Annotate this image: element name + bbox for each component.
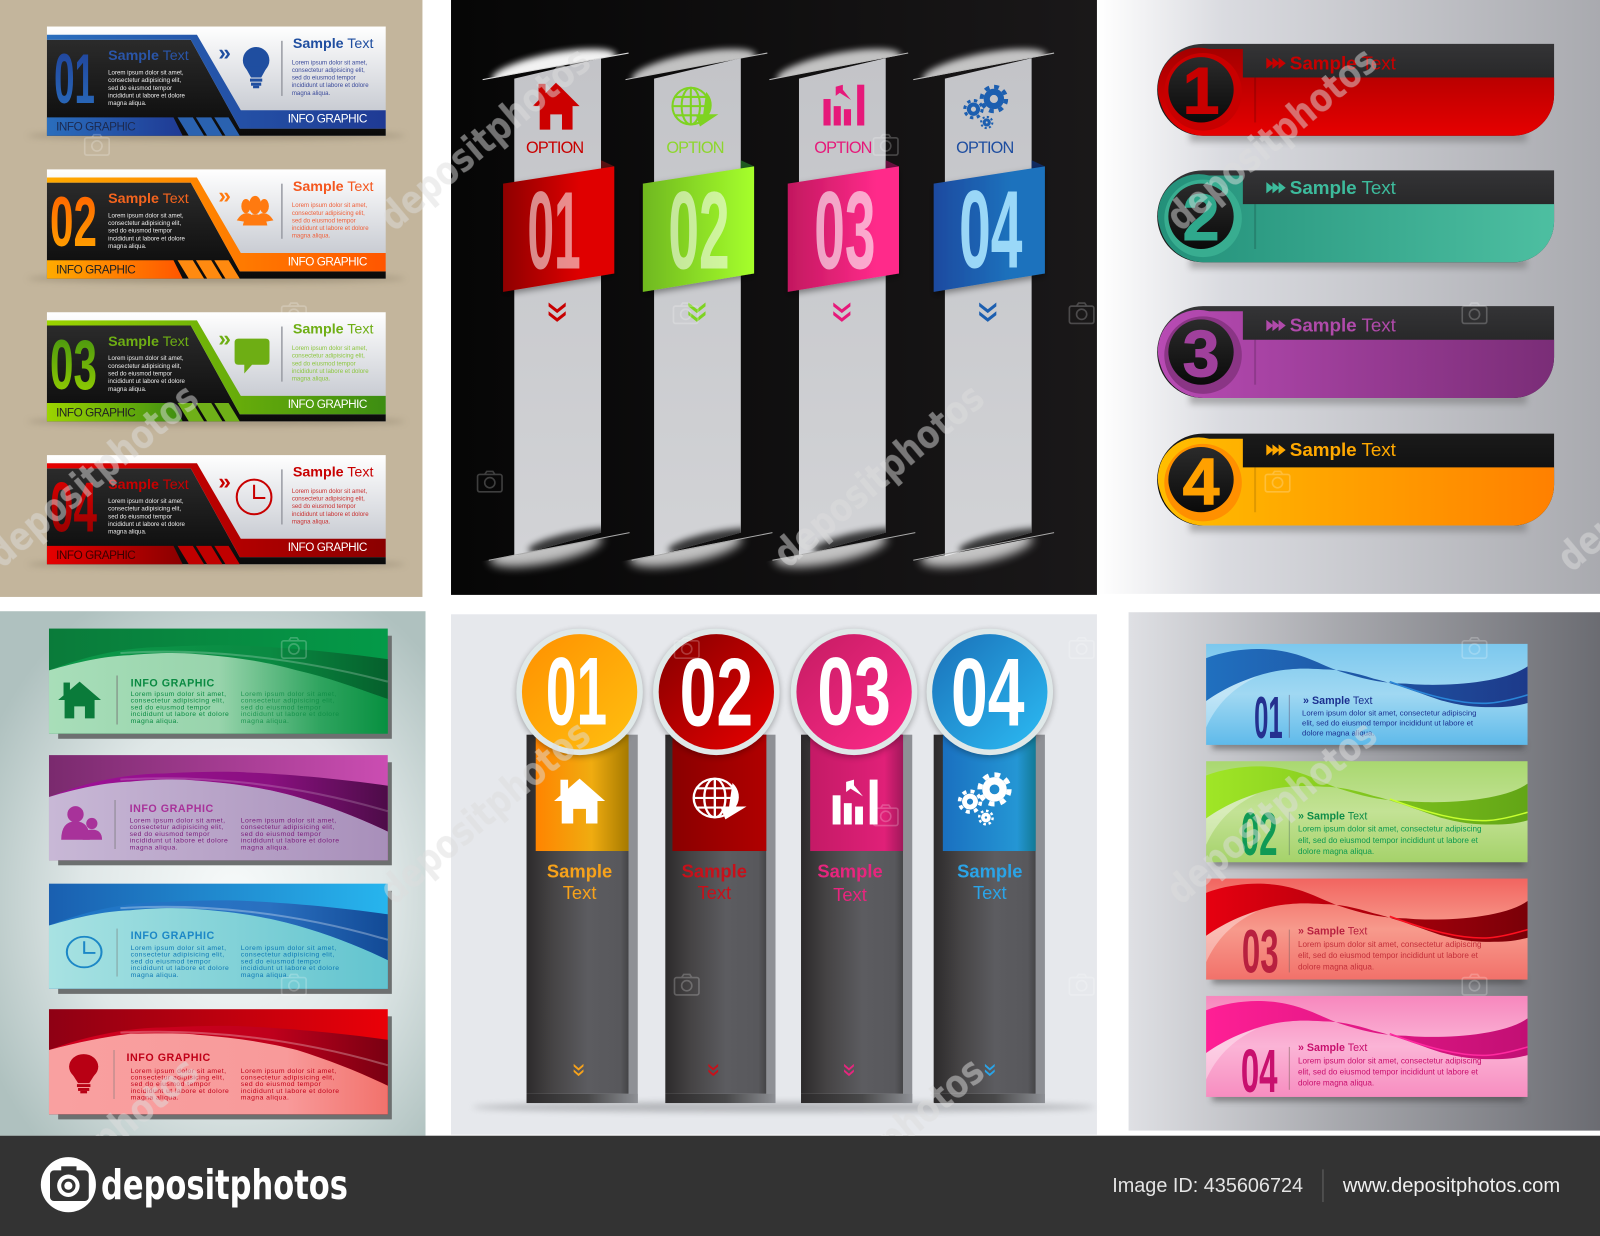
wave banner blue: dolore magna aliqua. [1302, 729, 1374, 738]
option strip 03 pink: OPTION [814, 139, 872, 157]
banner 03 green: » [218, 326, 231, 351]
curved banner purple: incididunt ut labore et dolore [241, 838, 339, 845]
pill banner 3 purple [1157, 306, 1554, 404]
curved banner green: magna aliqua. [241, 718, 289, 725]
banner 04 red [28, 455, 405, 568]
watermark: repeated depositphotos text and camera icons: depositphotos [765, 375, 994, 577]
curved banner red: incididunt ut labore et dolore [131, 1088, 229, 1095]
wave banner pink: Lorem ipsum dolor sit amet, consectetur adipiscing [1298, 1056, 1482, 1065]
option strip 02 green: 02 [668, 169, 730, 292]
wave banner green: elit, sed do eiusmod tempor incididunt ut labore et [1298, 836, 1479, 845]
curved banner green: consectetur adipisicing elit, [131, 698, 225, 705]
banner 04 red: INFO GRAPHIC [288, 541, 368, 554]
column 02 red [653, 629, 780, 1103]
banner 02 orange: INFO GRAPHIC [288, 255, 368, 268]
banner 02 orange: sed do eiusmod tempor [292, 217, 356, 224]
pill banner 4 orange: Sample Text [1290, 439, 1397, 460]
banner 01 blue: consectetur adipisicing elit, [108, 77, 181, 84]
column 01 orange: 01 [546, 636, 607, 745]
footer image id: Image ID: 435606724 [1112, 1175, 1303, 1197]
curved banner green: magna aliqua. [131, 718, 179, 725]
pill banner 4 orange: 4 [1183, 445, 1220, 519]
banner 01 blue: Lorem ipsum dolor sit amet, [292, 59, 368, 66]
column 03 pink: 03 [817, 636, 891, 745]
banner 03 green: INFO GRAPHIC [288, 398, 368, 411]
curved banner green: sed do eiusmod tempor [131, 704, 211, 711]
banner 02 orange: 02 [50, 182, 97, 261]
banner 04 red: incididunt ut labore et dolore [292, 511, 369, 518]
panel: black background with four option strips [451, 0, 1097, 595]
column 04 blue: Text [973, 882, 1007, 903]
curved banner green: Lorem ipsum dolor sit amet, [131, 691, 226, 698]
pill banner 3 purple: Sample Text [1290, 315, 1397, 336]
banner 02 orange [28, 169, 405, 283]
curved banner green: Lorem ipsum dolor sit amet, [241, 691, 337, 698]
curved banner red: magna aliqua. [131, 1094, 179, 1101]
banner 02 orange: consectetur adipisicing elit, [292, 210, 365, 217]
curved banner blue [49, 884, 392, 994]
banner 01 blue: Sample Text [293, 36, 374, 52]
wave banner green [1206, 761, 1528, 868]
column 01 orange [516, 629, 643, 1103]
banner 04 red: magna aliqua. [292, 518, 331, 525]
footer logo [41, 1157, 348, 1212]
curved banner purple [49, 755, 392, 865]
banner 01 blue: incididunt ut labore et dolore [108, 92, 186, 99]
banner 03 green: incididunt ut labore et dolore [108, 378, 186, 385]
curved banner purple: consectetur adipisicing elit, [130, 824, 224, 831]
banner 04 red: sed do eiusmod tempor [108, 513, 172, 520]
banner 03 green: sed do eiusmod tempor [292, 360, 356, 367]
option strip 04 blue: 04 [959, 168, 1022, 291]
banner 03 green: Sample Text [108, 334, 189, 350]
wave banner red: Lorem ipsum dolor sit amet, consectetur adipiscing [1298, 940, 1482, 949]
banner 01 blue: Lorem ipsum dolor sit amet, [108, 69, 184, 76]
banner 01 blue: magna aliqua. [292, 90, 331, 97]
banner 04 red: sed do eiusmod tempor [292, 503, 356, 510]
curved banner purple: consectetur adipisicing elit, [241, 824, 335, 831]
curved banner blue: incididunt ut labore et dolore [241, 965, 339, 972]
wave banner pink: 04 [1241, 1037, 1278, 1105]
column 04 blue: Sample [957, 861, 1022, 882]
banner 03 green: Lorem ipsum dolor sit amet, [108, 355, 184, 362]
panel: light grey background with four numbered columns [451, 614, 1097, 1135]
footer logo: depositphotos [101, 1161, 348, 1209]
banner 03 green: INFO GRAPHIC [56, 406, 136, 419]
option strip 02 green [626, 41, 772, 574]
curved banner purple: magna aliqua. [241, 844, 289, 851]
pill banner 1 red: Sample Text [1290, 52, 1397, 73]
column 04 blue [927, 629, 1053, 1103]
banner 04 red: consectetur adipisicing elit, [108, 506, 181, 513]
wave banner blue: 01 [1254, 684, 1283, 751]
banner 01 blue: INFO GRAPHIC [288, 112, 368, 125]
curved banner blue: Lorem ipsum dolor sit amet, [241, 945, 337, 952]
banner 01 blue: consectetur adipisicing elit, [292, 67, 365, 74]
curved banner red: sed do eiusmod tempor [131, 1081, 211, 1088]
curved banner blue: consectetur adipisicing elit, [131, 952, 225, 959]
curved banner red: sed do eiusmod tempor [241, 1081, 321, 1088]
banner 02 orange: incididunt ut labore et dolore [292, 225, 369, 232]
curved banner green: INFO GRAPHIC [131, 678, 215, 690]
wave banner green: dolore magna aliqua. [1298, 847, 1374, 856]
wave banner blue: elit, sed do eiusmod tempor incididunt ut labore et [1302, 719, 1474, 728]
curved banner red: Lorem ipsum dolor sit amet, [131, 1068, 226, 1075]
column 02 red: 02 [680, 638, 753, 747]
option strip 03 pink [769, 41, 915, 574]
banner 02 orange: magna aliqua. [292, 233, 331, 240]
curved banner green [49, 629, 392, 739]
curved banner blue: sed do eiusmod tempor [131, 958, 211, 965]
watermark: repeated depositphotos text and camera icons: depositphotos [1158, 712, 1386, 914]
curved banner blue: INFO GRAPHIC [131, 930, 215, 942]
banner 04 red: Lorem ipsum dolor sit amet, [108, 498, 184, 505]
option strip 01 red [483, 41, 630, 574]
option strip 01 red: OPTION [526, 139, 584, 157]
wave banner red: dolore magna aliqua. [1298, 962, 1374, 971]
banner 02 orange: consectetur adipisicing elit, [108, 220, 181, 227]
option strip 04 blue: OPTION [956, 139, 1014, 157]
pill banner 2 teal: Sample Text [1290, 177, 1397, 198]
banner 04 red: consectetur adipisicing elit, [292, 496, 365, 503]
column 03 pink [791, 629, 917, 1103]
curved banner blue: incididunt ut labore et dolore [131, 965, 229, 972]
curved banner purple: INFO GRAPHIC [130, 803, 214, 815]
curved banner blue: magna aliqua. [131, 972, 179, 979]
pill banner 3 purple: 3 [1183, 318, 1219, 392]
curved banner blue: sed do eiusmod tempor [241, 958, 321, 965]
wave banner pink: elit, sed do eiusmod tempor incididunt ut labore et [1298, 1067, 1479, 1076]
banner 03 green: 03 [50, 325, 97, 404]
banner 01 blue: sed do eiusmod tempor [292, 75, 356, 82]
footer bar [0, 1136, 1600, 1236]
wave banner pink: dolore magna aliqua. [1298, 1079, 1374, 1088]
banner 02 orange: incididunt ut labore et dolore [108, 235, 186, 242]
curved banner red: consectetur adipisicing elit, [131, 1075, 225, 1082]
banner 04 red: » [218, 469, 231, 494]
curved banner green: incididunt ut labore et dolore [241, 711, 339, 718]
column 02 red: Sample [682, 861, 747, 882]
banner 03 green: incididunt ut labore et dolore [292, 368, 369, 375]
banner 04 red: Sample Text [293, 465, 374, 481]
curved banner purple: incididunt ut labore et dolore [130, 838, 228, 845]
curved banner red: incididunt ut labore et dolore [241, 1088, 339, 1095]
banner 04 red: Sample Text [108, 477, 189, 493]
wave banner blue: Lorem ipsum dolor sit amet, consectetur adipiscing [1302, 708, 1477, 717]
pill banner 2 teal [1157, 170, 1554, 268]
banner 03 green: sed do eiusmod tempor [108, 371, 172, 378]
column 03 pink: Text [833, 884, 867, 905]
banner 04 red: magna aliqua. [108, 529, 147, 536]
curved banner blue: consectetur adipisicing elit, [241, 952, 335, 959]
pill banner 4 orange [1157, 434, 1554, 532]
banner 01 blue: Sample Text [108, 48, 189, 64]
banner 03 green: Sample Text [293, 322, 374, 338]
banner 02 orange: Lorem ipsum dolor sit amet, [292, 202, 368, 209]
column 04 blue: 04 [951, 638, 1025, 747]
option strip 02 green: OPTION [666, 139, 724, 157]
curved banner red: Lorem ipsum dolor sit amet, [241, 1068, 337, 1075]
banner 03 green: Lorem ipsum dolor sit amet, [292, 345, 368, 352]
wave banner red: » Sample Text [1298, 926, 1367, 938]
banner 02 orange: magna aliqua. [108, 243, 147, 250]
banner 02 orange: INFO GRAPHIC [56, 263, 136, 276]
panel: pale teal background with four curved banners [0, 611, 426, 1136]
banner 04 red: incididunt ut labore et dolore [108, 521, 186, 528]
panel: dark grey gradient background with four wave banners [1129, 612, 1600, 1131]
curved banner purple: sed do eiusmod tempor [241, 831, 321, 838]
curved banner blue: Lorem ipsum dolor sit amet, [131, 945, 226, 952]
banner 03 green: consectetur adipisicing elit, [292, 353, 365, 360]
banner 01 blue: magna aliqua. [108, 100, 147, 107]
footer website: www.depositphotos.com [1342, 1175, 1560, 1197]
banner 01 blue: sed do eiusmod tempor [108, 85, 172, 92]
pill banner 2 teal: 2 [1183, 181, 1219, 255]
banner 02 orange: » [218, 183, 231, 208]
wave banner blue: » Sample Text [1303, 695, 1372, 707]
pill banner 1 red [1157, 44, 1554, 142]
curved banner purple: Lorem ipsum dolor sit amet, [130, 817, 225, 824]
option strip 03 pink: 03 [814, 169, 876, 292]
banner 04 red: Lorem ipsum dolor sit amet, [292, 488, 368, 495]
curved banner red [49, 1009, 392, 1119]
banner 03 green: magna aliqua. [292, 376, 331, 383]
curved banner green: sed do eiusmod tempor [241, 704, 321, 711]
banner 03 green: magna aliqua. [108, 386, 147, 393]
banner 01 blue: » [218, 40, 231, 65]
wave banner green: 02 [1241, 800, 1278, 868]
option strip 01 red: 01 [528, 169, 581, 292]
banner 02 orange: Lorem ipsum dolor sit amet, [108, 212, 184, 219]
curved banner red: INFO GRAPHIC [127, 1052, 210, 1064]
wave banner blue [1206, 644, 1528, 751]
banner 01 blue: INFO GRAPHIC [56, 121, 136, 134]
banner 03 green: consectetur adipisicing elit, [108, 363, 181, 370]
banner 01 blue [28, 27, 405, 140]
watermark: repeated depositphotos text and camera icons: depositphotos [371, 712, 600, 914]
option strip 04 blue [913, 41, 1057, 574]
banner 02 orange: Sample Text [108, 191, 189, 207]
curved banner red: consectetur adipisicing elit, [241, 1075, 335, 1082]
curved banner purple: sed do eiusmod tempor [130, 831, 210, 838]
banner 03 green [28, 312, 405, 426]
curved banner green: consectetur adipisicing elit, [241, 698, 335, 705]
banner 01 blue: 01 [54, 39, 95, 118]
wave banner red: 03 [1242, 917, 1279, 985]
banner 04 red: 04 [50, 468, 97, 547]
column 01 orange: Sample [547, 861, 612, 882]
curved banner red: magna aliqua. [241, 1094, 289, 1101]
banner 02 orange: Sample Text [293, 179, 374, 195]
banner 02 orange: sed do eiusmod tempor [108, 228, 172, 235]
wave banner green: » Sample Text [1298, 810, 1367, 822]
column 01 orange: Text [563, 882, 596, 903]
curved banner purple: magna aliqua. [130, 844, 178, 851]
column 02 red: Text [697, 882, 731, 903]
wave banner red [1206, 879, 1528, 985]
column 03 pink: Sample [817, 861, 883, 882]
wave banner pink: » Sample Text [1298, 1042, 1367, 1054]
curved banner blue: magna aliqua. [241, 972, 289, 979]
wave banner pink [1206, 996, 1528, 1105]
curved banner purple: Lorem ipsum dolor sit amet, [241, 817, 337, 824]
panel: grey gradient background with four pill banners [1098, 0, 1600, 594]
banner 01 blue: incididunt ut labore et dolore [292, 82, 369, 89]
wave banner green: Lorem ipsum dolor sit amet, consectetur adipiscing [1298, 825, 1482, 834]
panel: tan background with four dark banners [0, 0, 422, 597]
pill banner 1 red: 1 [1183, 54, 1219, 128]
banner 04 red: INFO GRAPHIC [56, 549, 136, 562]
curved banner green: incididunt ut labore et dolore [131, 711, 229, 718]
wave banner red: elit, sed do eiusmod tempor incididunt ut labore et [1298, 951, 1479, 960]
